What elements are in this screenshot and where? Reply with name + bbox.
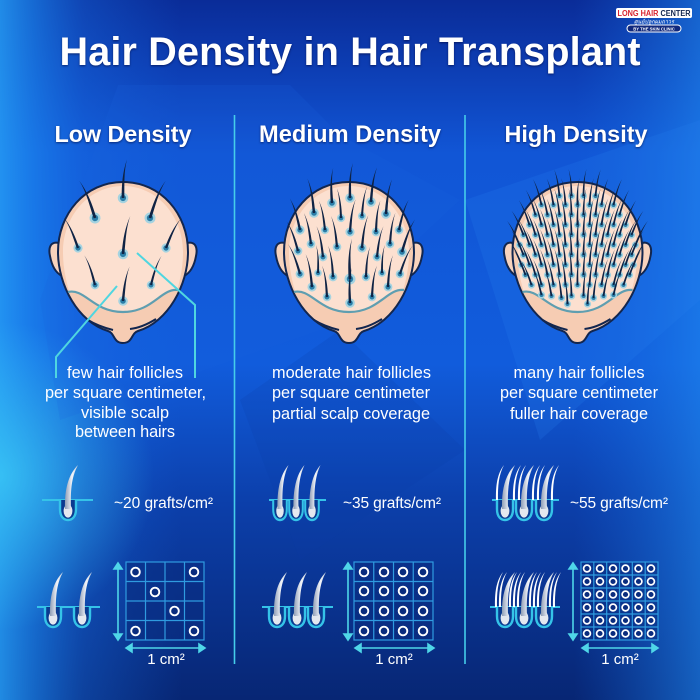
description: medium density: moderate hair follicles xyxy=(272,364,431,382)
logo: BY THE SKIN CLINIC xyxy=(633,26,675,32)
heading: medium density: Medium Density xyxy=(259,122,441,148)
scale label: low density: 1 cm² xyxy=(147,651,185,668)
follicle group: high density xyxy=(490,572,561,627)
logo xyxy=(616,8,692,32)
scale arrows: medium density xyxy=(344,563,434,652)
grafts label: low density: ~20 grafts/cm² xyxy=(114,495,213,512)
head: medium density xyxy=(275,163,423,343)
description: low density: few hair follicles xyxy=(67,364,183,382)
grid: high density xyxy=(581,562,658,640)
description: high density: many hair follicles xyxy=(514,364,644,382)
grafts label: high density: ~55 grafts/cm² xyxy=(570,495,668,512)
follicle icon: high density xyxy=(492,465,559,520)
heading: low density: Low Density xyxy=(54,121,192,147)
description: high density: fuller hair coverage xyxy=(510,405,648,423)
grid: low density xyxy=(126,562,204,640)
description: high density: per square centimeter xyxy=(500,384,659,402)
grafts label: medium density: ~35 grafts/cm² xyxy=(343,495,441,512)
description: medium density: partial scalp coverage xyxy=(272,405,430,423)
logo: ศูนย์ปลูกผมถาวร xyxy=(634,18,675,26)
scale label: high density: 1 cm² xyxy=(601,651,639,668)
title: Hair Density in Hair Transplant xyxy=(60,30,640,74)
description: medium density xyxy=(272,364,431,423)
scale arrows: low density xyxy=(114,563,205,652)
description: low density: per square centimeter, xyxy=(45,384,206,402)
follicle icon: low density xyxy=(42,465,93,520)
scale label: medium density: 1 cm² xyxy=(375,651,413,668)
follicle group: medium density xyxy=(262,572,333,627)
description: high density xyxy=(500,364,659,423)
logo: LONG HAIR CENTER xyxy=(618,8,691,18)
column divider right xyxy=(464,115,466,664)
description: low density xyxy=(45,364,206,441)
follicle pair: low density xyxy=(37,572,100,627)
head: low density xyxy=(49,159,197,343)
grid: medium density xyxy=(354,562,433,640)
follicle icon: medium density xyxy=(269,465,326,520)
scale arrows: high density xyxy=(569,563,658,652)
description: low density: visible scalp xyxy=(81,404,169,422)
description: medium density: per square centimeter xyxy=(272,384,431,402)
callout lines: low density xyxy=(56,253,195,378)
column divider left xyxy=(234,115,236,664)
head: high density xyxy=(504,169,651,343)
description: low density: between hairs xyxy=(75,423,175,441)
heading: high density: High Density xyxy=(504,121,648,147)
